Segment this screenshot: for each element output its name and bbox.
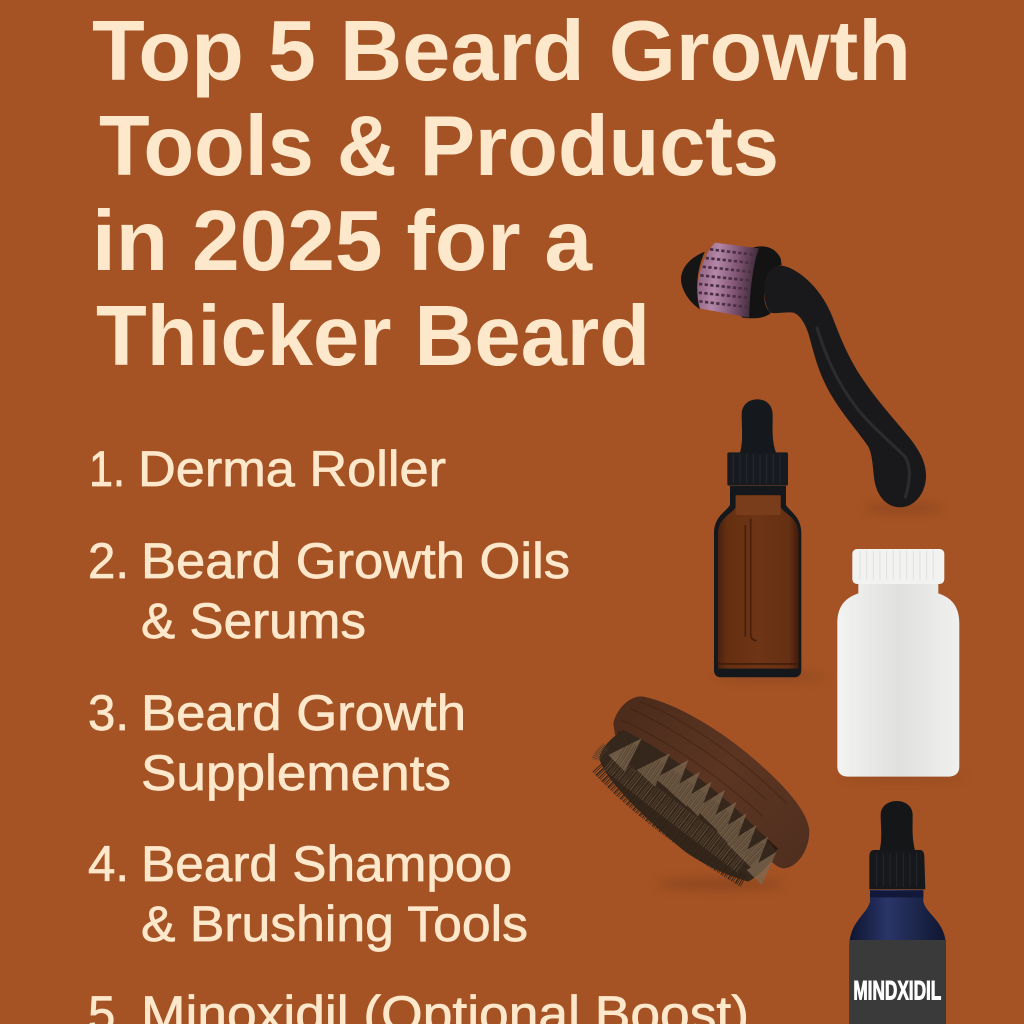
white cap bbox=[852, 549, 944, 584]
list item 3 bbox=[88, 685, 466, 801]
list item 2 bbox=[88, 533, 570, 649]
numbered list of products bbox=[88, 441, 749, 1024]
roller end cap bbox=[681, 252, 705, 309]
bottle body bbox=[837, 582, 959, 777]
list item 4: Beard Shampoo bbox=[141, 836, 512, 892]
amber bottle glass bbox=[714, 486, 801, 677]
bristles bbox=[596, 730, 777, 885]
title: Tools & Products bbox=[99, 99, 779, 194]
list item 2: & Serums bbox=[141, 593, 366, 649]
wood base bbox=[613, 697, 809, 868]
list item 3: 3. bbox=[88, 685, 129, 741]
blue glass body bbox=[849, 890, 946, 1024]
dropper bulb bbox=[879, 801, 915, 852]
list item 1: 1. bbox=[89, 441, 125, 497]
title: in 2025 for a bbox=[92, 194, 593, 289]
title: Thicker Beard bbox=[96, 289, 650, 384]
list item 2: Beard Growth Oils bbox=[141, 533, 570, 589]
list item 3: Beard Growth bbox=[141, 685, 466, 741]
icon: wooden beard brush bbox=[596, 697, 809, 889]
dropper cap bbox=[727, 452, 788, 486]
product name: MINDXIDIL bbox=[853, 975, 941, 1005]
roller handle bbox=[764, 265, 926, 507]
title: Top 5 Beard Growth bbox=[92, 4, 911, 99]
list item 2: 2. bbox=[88, 533, 129, 589]
roller collar bbox=[742, 246, 782, 318]
title bbox=[92, 4, 911, 384]
dropper cap bbox=[869, 850, 925, 889]
needle drum bbox=[697, 243, 759, 318]
list item 4: & Brushing Tools bbox=[141, 896, 528, 952]
list item 1: Derma Roller bbox=[138, 441, 446, 497]
list item 4: 4. bbox=[88, 836, 129, 892]
list item 3: Supplements bbox=[141, 745, 451, 801]
dropper bulb bbox=[740, 399, 776, 453]
icon: blue Mindxidil bottle bbox=[849, 801, 946, 1024]
icon: white supplement bottle bbox=[837, 549, 967, 779]
icon: amber dropper bottle bbox=[713, 399, 827, 680]
grey label bbox=[849, 940, 946, 1024]
list item 4 bbox=[88, 836, 528, 952]
icon: derma roller bbox=[681, 243, 943, 512]
